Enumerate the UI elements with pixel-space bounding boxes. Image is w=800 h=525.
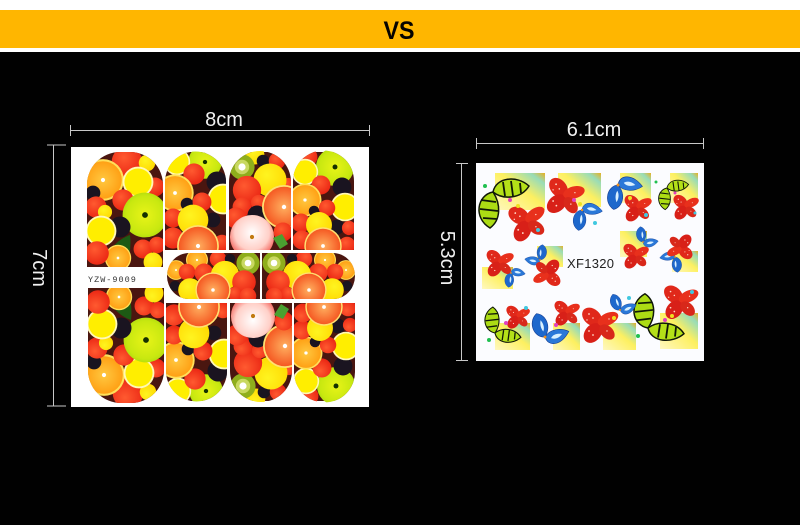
width dimension: 6.1cm: 6.1cm [567,119,621,141]
blue butterflies [505,177,682,347]
nail decal: top third [225,146,306,259]
nail decal: top left [82,147,167,271]
header banner [0,10,800,52]
panel: fruit decal sheet [71,145,369,408]
nail decal: top second [156,145,238,267]
nail decal: bottom fourth [290,288,360,405]
confetti dots [483,180,696,342]
nail decal: middle right strip [262,249,356,308]
height dimension: 5.3cm: 5.3cm [436,231,458,285]
product code: YZW-9009: YZW-9009 [88,275,137,285]
nail decal: bottom second [157,286,239,408]
nail decal: middle left strip [166,249,260,308]
width dimension: 6.1cm [476,119,704,149]
nail decal: bottom left [83,284,168,408]
nail decal: bottom third [226,294,307,407]
width dimension: 8cm [70,109,370,136]
nail decal: top fourth [288,148,359,265]
green butterflies [479,179,689,342]
panel: butterfly decal sheet [476,163,704,361]
red butterflies [484,172,700,347]
height dimension: 7cm: 7cm [28,249,50,287]
heading: VS: VS [384,17,414,45]
product code: XF1320: XF1320 [567,256,614,271]
height dimension: 5.3cm [436,163,468,361]
width dimension: 8cm: 8cm [205,109,243,131]
height dimension: 7cm [28,145,66,406]
yellow background squares [482,173,698,350]
top white strip [0,0,800,10]
